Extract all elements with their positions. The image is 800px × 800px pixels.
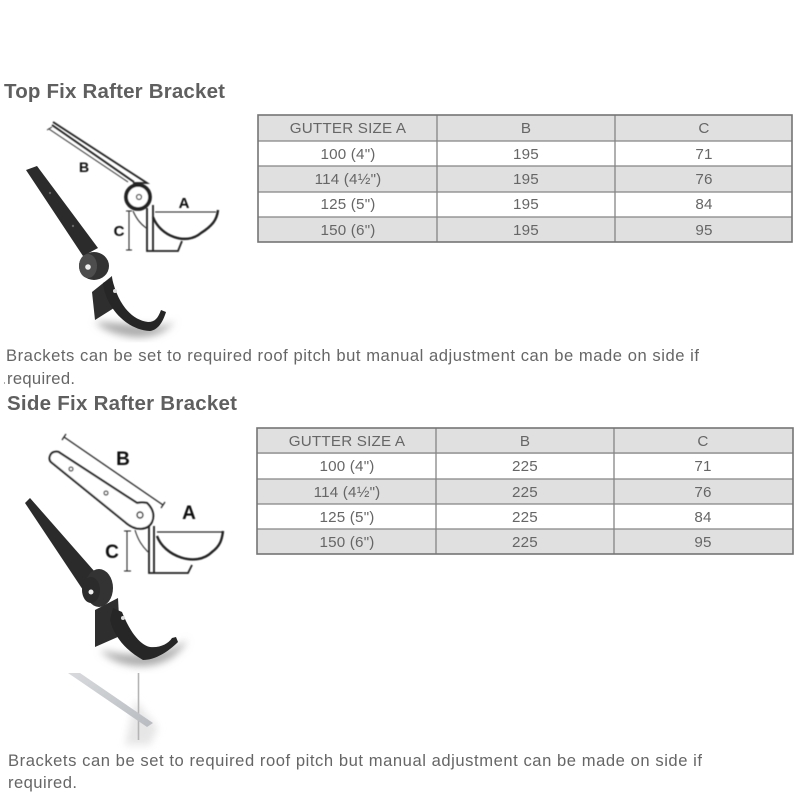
label B: B [79,159,89,175]
label A: A [182,503,196,524]
shadow [125,700,158,745]
bracket curve [135,530,148,552]
table: side fix dimensions: 100 (4") [319,458,375,475]
strap [26,166,98,256]
text: top fix note [4,346,699,388]
table: side fix dimensions: 225 [512,484,538,501]
pivot wheel [126,185,150,209]
photo: side fix bracket [25,498,187,666]
photo: strap fixing [68,673,158,745]
upright [149,526,192,573]
table: top fix dimensions: 114 (4½") [315,171,381,188]
text: top fix note: required. [7,369,75,388]
arm holes [69,467,73,471]
text: top fix note: Brackets can be set to required roof pitch but manual adjustment can be made on side if [6,346,699,365]
shadow [95,320,175,337]
label A: A [179,195,190,212]
heading: top fix rafter bracket: Top Fix Rafter Bracket [4,80,225,103]
table: top fix dimensions [258,115,792,242]
table: side fix dimensions: 114 (4½") [314,484,380,501]
dimension C [124,531,131,571]
table: side fix dimensions: 76 [694,484,712,501]
text: side fix note [8,751,702,792]
table: top fix dimensions: 84 [695,196,713,213]
table: top fix dimensions: C [698,120,710,137]
plate [95,598,120,647]
diagram: top fix line drawing [47,122,218,251]
table: top fix dimensions: B [521,120,531,137]
table: side fix dimensions: 225 [512,534,538,551]
table: side fix dimensions: 225 [512,509,538,526]
photo: top fix bracket [26,166,175,337]
arm outline [50,452,153,529]
table: side fix dimensions: 84 [694,509,712,526]
table: top fix dimensions: 195 [513,222,539,239]
table: top fix dimensions: 125 (5") [320,196,376,213]
table: side fix dimensions: C [697,433,709,450]
hub [79,252,109,280]
label C: C [105,542,119,563]
label C: C [114,223,125,240]
plate [92,276,114,320]
table: side fix dimensions: 225 [512,458,538,475]
table: top fix dimensions: 150 (6") [320,222,376,239]
table: side fix dimensions: GUTTER SIZE A [289,433,406,450]
pivot hole [136,194,142,200]
rafter arm [52,122,147,183]
dimension B [62,434,165,508]
gutter profile [153,210,218,239]
diagram: side fix line drawing [50,434,223,573]
upright [147,205,182,251]
strap holes [49,192,51,194]
table: side fix dimensions: 95 [694,534,712,551]
hook [103,278,166,331]
table: side fix dimensions [257,428,793,554]
text: side fix note: required. [8,773,77,792]
text: side fix note: Brackets can be set to required roof pitch but manual adjustment can be made on side if [8,751,702,770]
table: side fix dimensions: 150 (6") [319,534,375,551]
table: top fix dimensions: 195 [513,146,539,163]
table: top fix dimensions: GUTTER SIZE A [290,120,407,137]
gutter profile [157,531,223,559]
table: top fix dimensions: 100 (4") [320,146,376,163]
table: top fix dimensions: 95 [695,222,713,239]
table: top fix dimensions: 71 [695,146,713,163]
dimension A [155,211,216,213]
table: top fix dimensions: 76 [695,171,713,188]
table: side fix dimensions: B [520,433,530,450]
dimension A [157,531,222,533]
table: top fix dimensions: 195 [513,171,539,188]
table: side fix dimensions: 125 (5") [319,509,375,526]
table: side fix dimensions: 71 [694,458,712,475]
heading: side fix rafter bracket: Side Fix Rafter Bracket [7,392,237,415]
metal strip [68,673,153,727]
label B: B [116,449,130,470]
bracket curve [133,211,146,228]
hub [85,569,113,607]
vertical rafter line [138,673,140,740]
dimension B arrow [47,127,128,182]
dimension C [126,211,132,250]
shadow [100,640,187,666]
hook [110,608,178,660]
strap [25,498,95,590]
table: top fix dimensions: 195 [513,196,539,213]
